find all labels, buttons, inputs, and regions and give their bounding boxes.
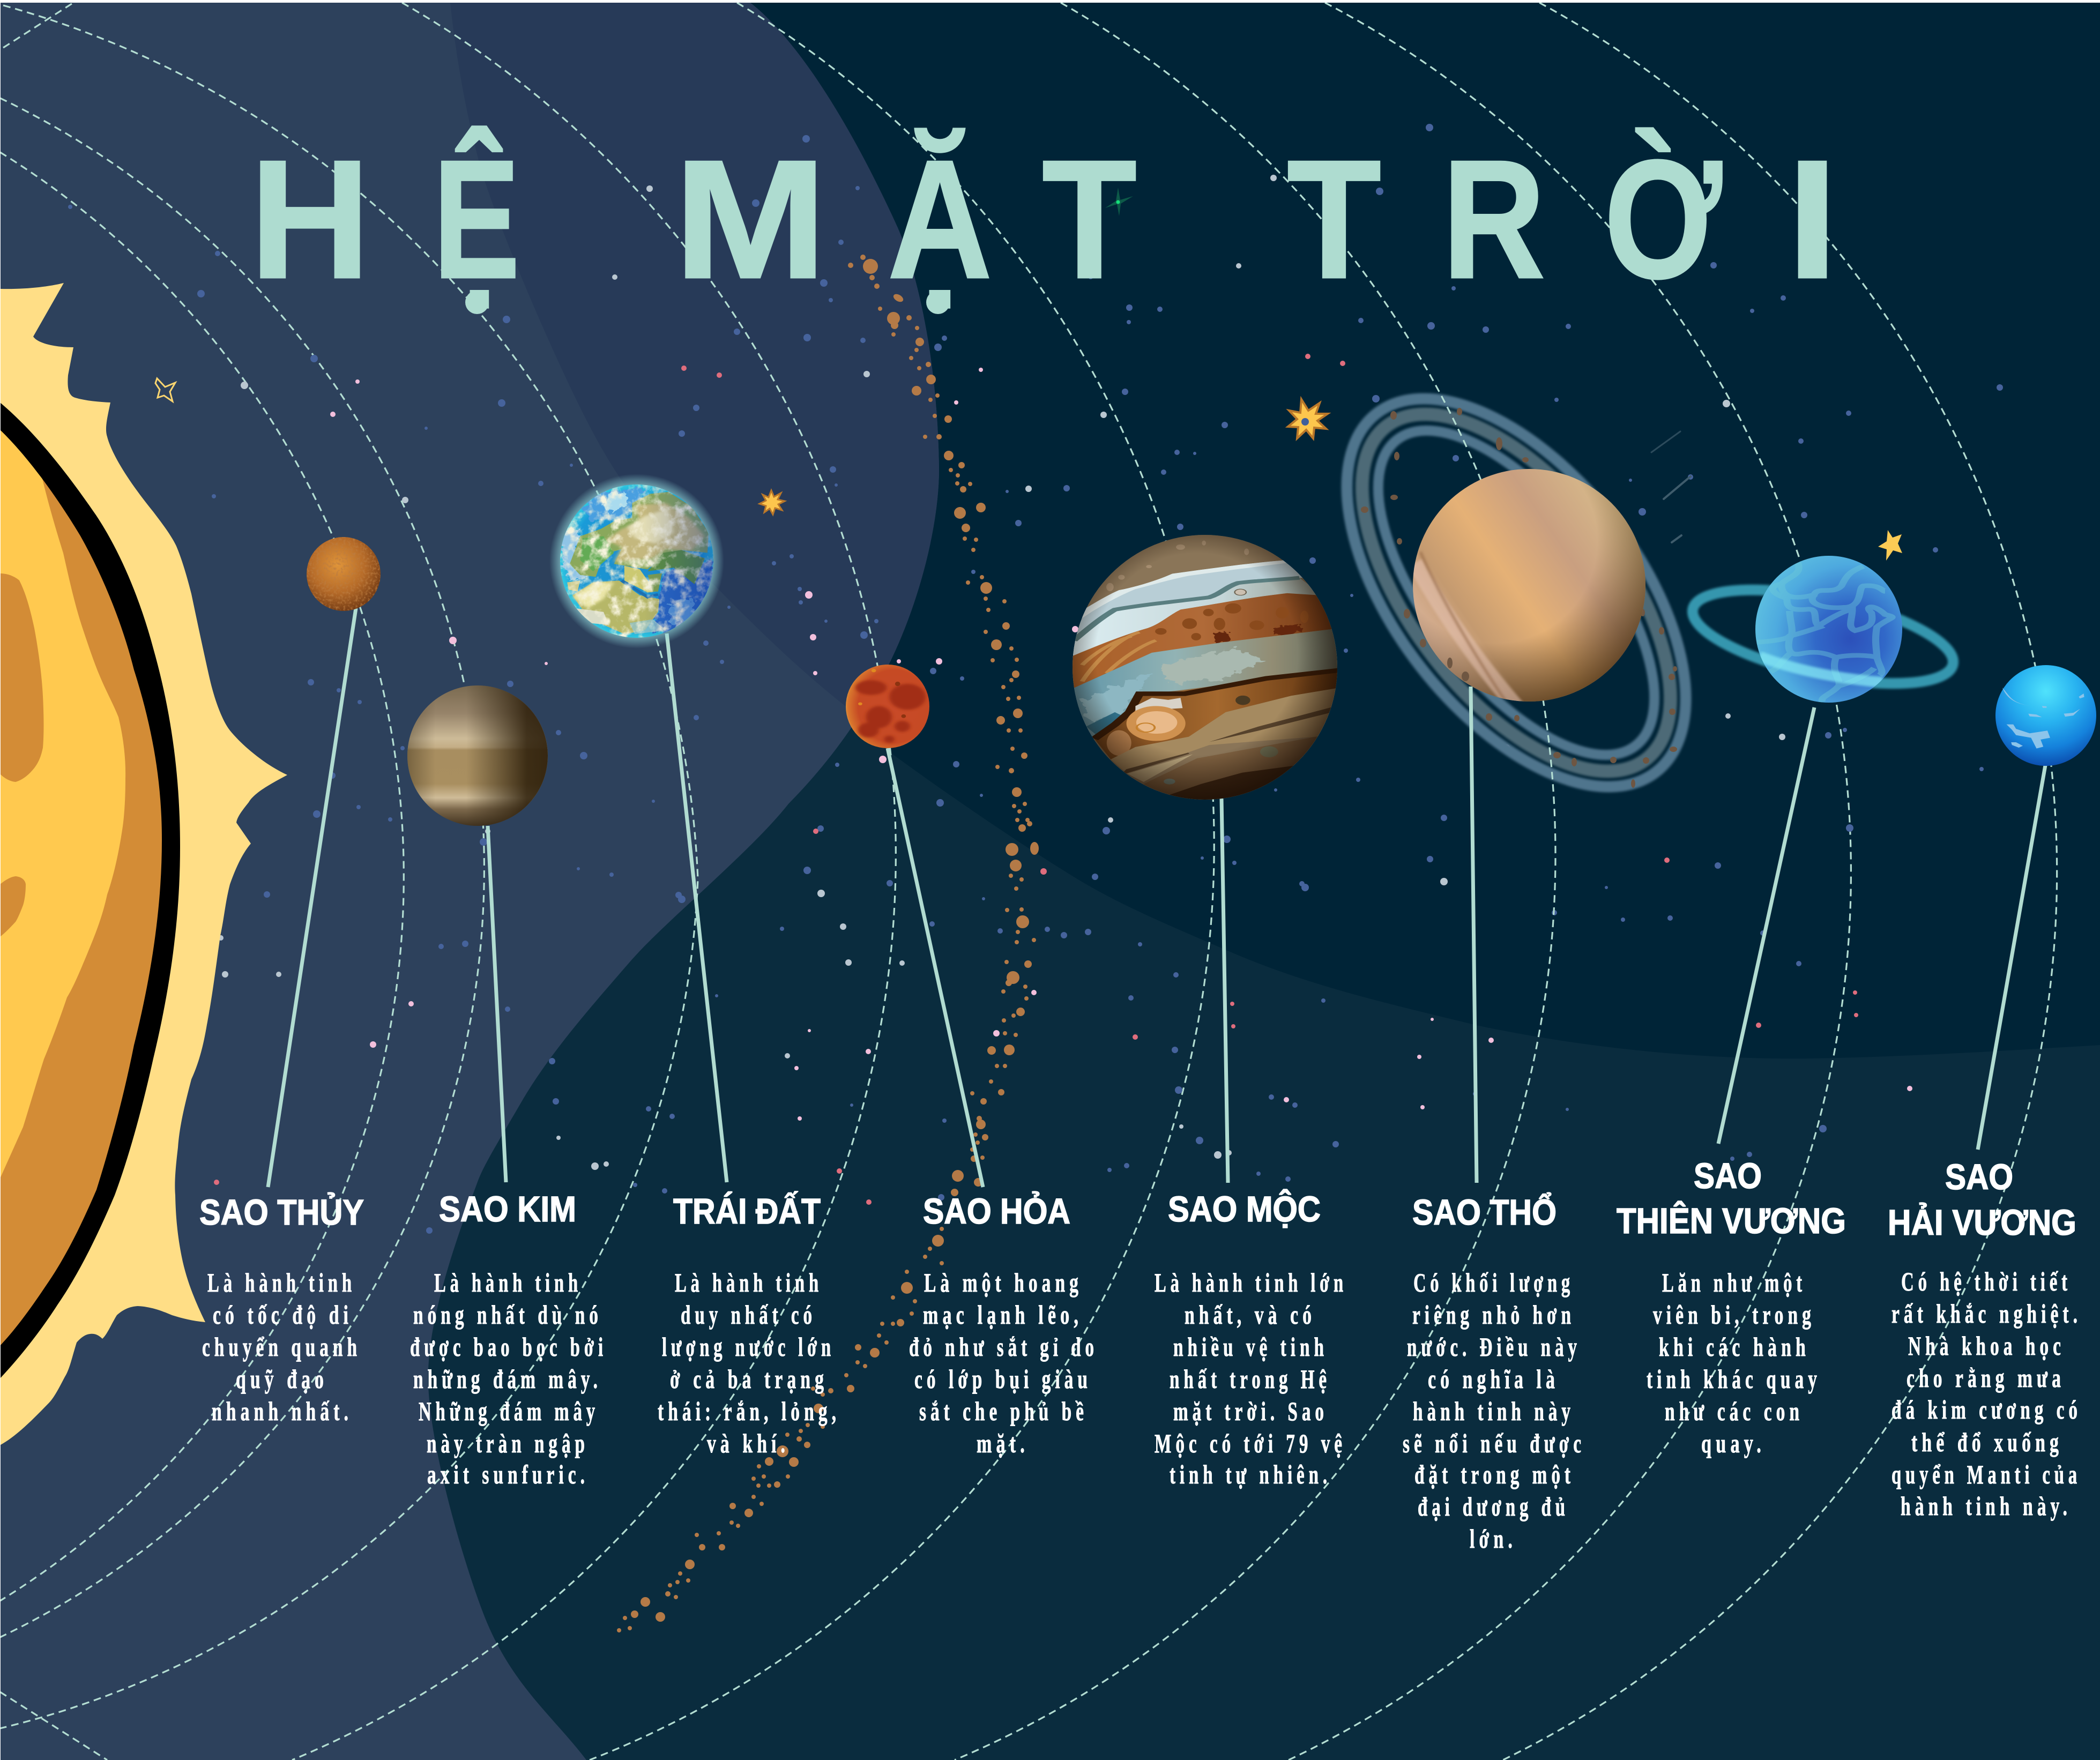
saturn ring rocks bbox=[1361, 408, 1677, 788]
text: Mercury description: Là hành tinh bbox=[207, 1267, 356, 1297]
text: Jupiter description bbox=[1155, 1267, 1347, 1489]
text: Mars description: mạc lạnh lẽo, bbox=[923, 1300, 1083, 1330]
text: Saturn description: đại dương đủ bbox=[1418, 1491, 1569, 1522]
planet: Saturn rings bbox=[1281, 339, 1752, 846]
sun bbox=[0, 283, 287, 1445]
text: Saturn description: nước. Điều này bbox=[1407, 1332, 1581, 1362]
title: I bbox=[1786, 125, 1838, 314]
label: Uranus bbox=[1617, 1156, 1846, 1458]
text: Uranus description: viên bi, trong bbox=[1653, 1300, 1815, 1330]
text: Earth description: ở cả ba trạng bbox=[670, 1364, 828, 1394]
label: Mercury bbox=[199, 1192, 364, 1426]
text: Saturn description: hành tinh này bbox=[1413, 1396, 1575, 1426]
text: Venus description: Những đám mây bbox=[419, 1396, 599, 1426]
label: Uranus: SAO bbox=[1694, 1156, 1762, 1196]
title: R bbox=[1442, 125, 1545, 314]
title: T bbox=[1042, 125, 1137, 314]
panel: left light blob bbox=[1, 3, 939, 1760]
label: Uranus: THIÊN VƯƠNG bbox=[1617, 1201, 1846, 1241]
label: Saturn: SAO THỔ bbox=[1412, 1192, 1557, 1233]
label: Mars bbox=[909, 1191, 1098, 1458]
planet: Saturn bbox=[1413, 469, 1645, 707]
title: Ặ bbox=[888, 125, 992, 314]
text: Earth description: và khí. bbox=[707, 1428, 790, 1458]
text: Earth description: thái: rắn, lỏng, bbox=[658, 1396, 840, 1426]
label: Neptune: SAO bbox=[1945, 1157, 2013, 1197]
text: Jupiter description: mặt trời. Sao bbox=[1173, 1396, 1328, 1426]
icon: outline star bbox=[155, 378, 175, 401]
title: Ệ bbox=[433, 125, 520, 314]
asteroid belt bbox=[617, 255, 1039, 1632]
text: Mars description: sắt che phủ bề bbox=[919, 1396, 1088, 1426]
text: Jupiter description: nhất, và có bbox=[1185, 1300, 1316, 1330]
panel: dark upper sky bbox=[697, 3, 2100, 1058]
text: Uranus description: khi các hành bbox=[1659, 1332, 1810, 1362]
sun yellow surface bbox=[0, 418, 125, 1179]
text: Venus description bbox=[410, 1267, 607, 1489]
text: Uranus description: Lăn như một bbox=[1662, 1267, 1806, 1297]
text: Uranus description: quay. bbox=[1701, 1428, 1766, 1458]
title diacritic dots bbox=[465, 290, 950, 314]
stalks bbox=[268, 608, 2045, 1187]
text: Uranus description bbox=[1647, 1267, 1821, 1458]
label: Earth: TRÁI ĐẤT bbox=[673, 1191, 821, 1232]
text: Earth description: Là hành tinh bbox=[675, 1267, 823, 1297]
text: Saturn description: sẽ nổi nếu được bbox=[1403, 1428, 1585, 1458]
text: Venus description: những đám mây. bbox=[413, 1364, 602, 1394]
title: T bbox=[1287, 125, 1381, 314]
icon: small burst star bbox=[759, 490, 785, 514]
text: Saturn description: lớn. bbox=[1470, 1524, 1517, 1554]
label: Neptune bbox=[1888, 1157, 2082, 1521]
label: Venus: SAO KIM bbox=[439, 1189, 576, 1229]
text: Jupiter description: nhất trong Hệ bbox=[1170, 1364, 1331, 1394]
planet: Uranus ring back bbox=[1685, 571, 1961, 702]
jupiter lower tan bands bbox=[1111, 688, 1341, 774]
text: Uranus description: tinh khác quay bbox=[1647, 1364, 1821, 1394]
text: Mercury description bbox=[202, 1267, 361, 1426]
panel: middle blob bbox=[450, 3, 939, 715]
jupiter pale band bbox=[1070, 561, 1341, 645]
text: Venus description: này tràn ngập bbox=[427, 1428, 589, 1458]
label: Jupiter: SAO MỘC bbox=[1168, 1189, 1321, 1229]
jupiter blue band bbox=[1066, 628, 1341, 739]
text: Earth description bbox=[658, 1267, 840, 1458]
icon: green sparkle bbox=[1105, 188, 1133, 216]
sun corona bbox=[1, 283, 287, 1445]
label: Neptune: HẢI VƯƠNG bbox=[1888, 1203, 2076, 1243]
text: Earth description: lượng nước lớn bbox=[662, 1332, 835, 1362]
text: Earth description: duy nhất có bbox=[681, 1300, 816, 1330]
star specks: blue bbox=[68, 124, 2003, 1234]
text: Mercury description: nhanh nhất. bbox=[212, 1396, 353, 1426]
sun black ring bbox=[0, 402, 180, 1378]
text: Venus description: nóng nhất dù nó bbox=[413, 1300, 602, 1330]
text: Jupiter description: tinh tự nhiên. bbox=[1170, 1459, 1331, 1489]
label: Jupiter bbox=[1155, 1189, 1347, 1489]
text: Mars description: đỏ như sắt gỉ do bbox=[909, 1332, 1098, 1362]
text: Saturn description bbox=[1403, 1267, 1585, 1554]
text: Saturn description: riêng nhỏ hơn bbox=[1412, 1300, 1575, 1330]
text: Mercury description: quỹ đạo bbox=[236, 1364, 328, 1394]
planet: Earth bbox=[549, 474, 724, 648]
star specks: red bbox=[214, 354, 1858, 1205]
title: Ờ bbox=[1604, 125, 1723, 314]
text: Uranus description: như các con bbox=[1665, 1396, 1804, 1426]
label: Mercury: SAO THỦY bbox=[199, 1192, 364, 1233]
planet: Mercury bbox=[307, 537, 381, 611]
text: Mars description bbox=[909, 1267, 1098, 1458]
star specks: grey bbox=[218, 175, 1785, 1170]
jupiter orange band bbox=[1066, 593, 1341, 692]
planet: Uranus bbox=[1755, 556, 1902, 703]
text: Venus description: Là hành tinh bbox=[434, 1267, 582, 1297]
label: Mars: SAO HỎA bbox=[923, 1191, 1070, 1232]
text: Saturn description: Có khối lượng bbox=[1413, 1267, 1574, 1297]
star specks: pink bbox=[330, 368, 1912, 1121]
label: Venus bbox=[410, 1189, 607, 1489]
planet: Mars bbox=[846, 665, 929, 748]
planet: Neptune bbox=[1995, 665, 2096, 766]
planet: Jupiter bbox=[1066, 535, 1341, 807]
text: Jupiter description: Mộc có tới 79 vệ bbox=[1155, 1428, 1346, 1458]
icon: large burst star bbox=[1288, 399, 1328, 438]
text: Saturn description: có nghĩa là bbox=[1428, 1364, 1559, 1394]
jupiter brown band bbox=[1094, 669, 1341, 759]
text: Venus description: được bao bọc bởi bbox=[410, 1332, 607, 1362]
text: Venus description: axit sunfuric. bbox=[427, 1459, 589, 1489]
orbit over Saturn ring bbox=[955, 3, 1555, 1760]
title: H bbox=[250, 125, 370, 314]
icon: yellow star bbox=[1878, 530, 1902, 561]
sun body bbox=[0, 430, 162, 1346]
label: Saturn bbox=[1403, 1192, 1585, 1554]
title: M bbox=[674, 125, 827, 314]
text: Mars description: có lớp bụi giàu bbox=[914, 1364, 1092, 1394]
text: Neptune description bbox=[1892, 1266, 2082, 1521]
text: Mars description: Là một hoang bbox=[924, 1267, 1083, 1297]
label: Earth bbox=[658, 1191, 840, 1458]
text: Jupiter description: Là hành tinh lớn bbox=[1155, 1267, 1347, 1297]
text: Mars description: mặt. bbox=[977, 1428, 1029, 1458]
text: Jupiter description: nhiều vệ tinh bbox=[1173, 1332, 1328, 1362]
text: Mercury description: chuyển quanh bbox=[202, 1332, 361, 1362]
icon: meteor streaks bbox=[1651, 431, 1691, 542]
planet: Venus bbox=[407, 685, 548, 826]
text: Mercury description: có tốc độ di bbox=[213, 1300, 353, 1330]
title bbox=[250, 125, 1838, 314]
text: Saturn description: đặt trong một bbox=[1414, 1459, 1575, 1489]
